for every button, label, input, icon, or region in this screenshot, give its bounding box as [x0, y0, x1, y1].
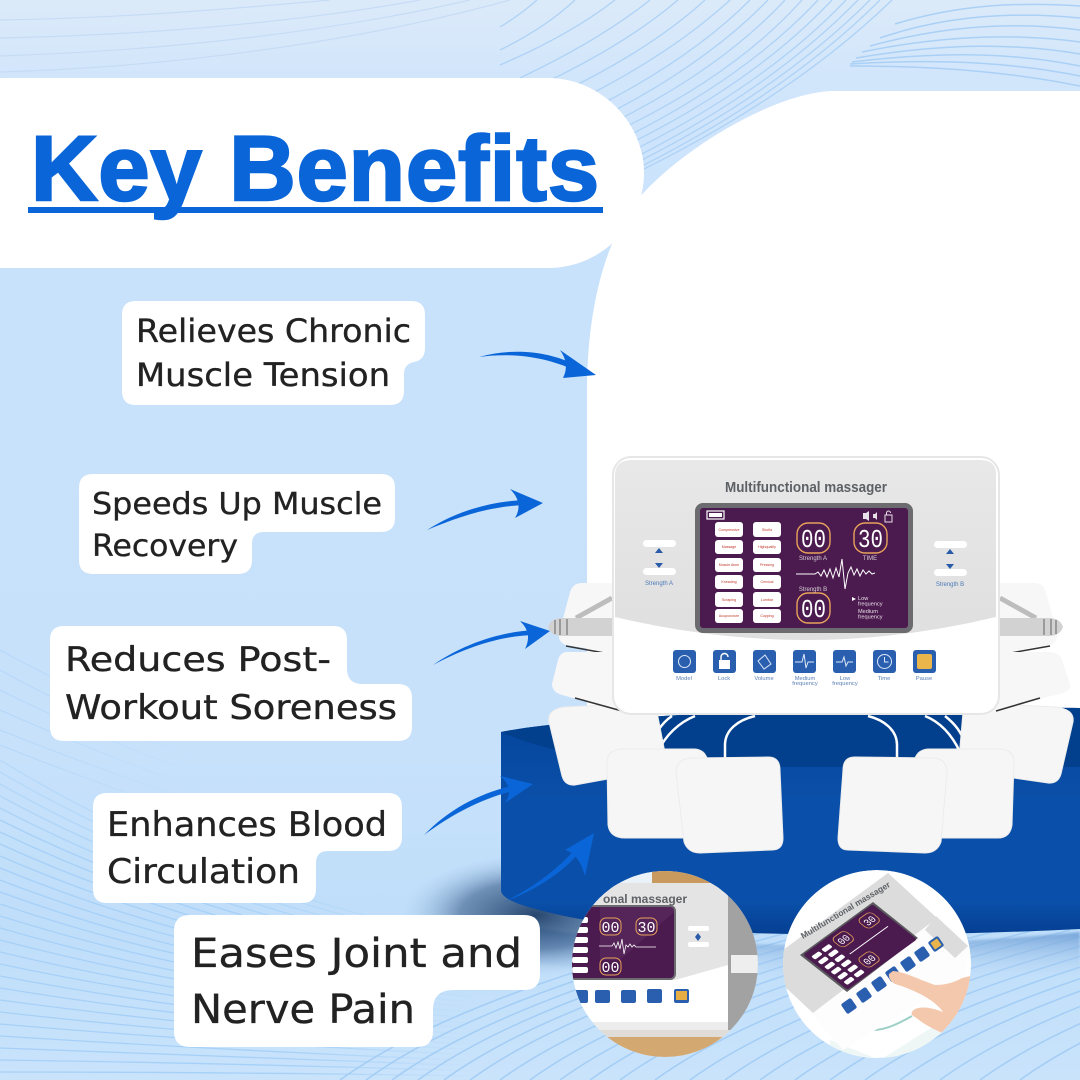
time display [854, 523, 887, 562]
time display: 30 [858, 525, 883, 555]
strength B display: 00 [801, 595, 826, 625]
mode buttons: Scraping [722, 598, 736, 602]
strength B control [934, 541, 967, 588]
arrow: Relieves [479, 350, 596, 378]
strength B control: Strength B [936, 582, 964, 588]
callout: Speeds Up Muscle Recovery: Speeds Up Muscle [92, 487, 382, 522]
control buttons: Low [840, 676, 851, 682]
mode buttons: Lumbar [761, 598, 774, 602]
product photo circle: finger pressing button: Multifunctional massager [799, 879, 892, 941]
mode buttons: Highquality [758, 545, 776, 549]
product photo circle: screen close-up [572, 871, 758, 1057]
arrow: Enhances [424, 776, 533, 835]
callout: Relieves Chronic Muscle Tension: Muscle Tension [136, 356, 390, 394]
product photo circle: screen close-up: 00 [601, 960, 620, 977]
callout: Enhances Blood Circulation [93, 793, 402, 903]
callout: Reduces Post-Workout Soreness: Reduces Post- [65, 640, 331, 680]
control buttons: frequency [832, 681, 858, 687]
mode buttons: Kneading [721, 580, 737, 584]
title panel [0, 78, 644, 268]
mode buttons: Acupuncture [719, 614, 739, 618]
callout: Eases Joint and Nerve Pain: Nerve Pain [191, 987, 415, 1033]
product photo circle: finger pressing button: 00 [836, 934, 854, 948]
strength A control [643, 540, 676, 587]
pedestal: blue cylinder [400, 708, 1080, 981]
mode buttons: Massage [722, 545, 736, 549]
frequency labels: frequency [858, 614, 883, 620]
frequency labels: Low [858, 596, 869, 602]
arrow: Eases [504, 833, 594, 902]
strength B display: Strength B [799, 587, 827, 593]
product photo circle: finger pressing button: 30 [862, 915, 880, 929]
time display: TIME [863, 556, 877, 562]
arrow: Speeds [427, 489, 543, 530]
control buttons: Medium [795, 676, 815, 682]
device: multifunctional massager [613, 457, 999, 714]
callout: Enhances Blood Circulation: Enhances Blood [107, 805, 387, 845]
frequency labels: frequency [858, 602, 883, 608]
status icons [863, 511, 892, 522]
strength A display: 00 [801, 525, 826, 555]
arrow: Reduces [433, 621, 550, 665]
product photo circle: finger pressing button: 00 [862, 954, 880, 968]
mode buttons: Cervical [761, 580, 774, 584]
mode buttons: Muscle Atom [719, 563, 739, 567]
electrode pads: lower left [549, 703, 783, 853]
control buttons: frequency [792, 681, 818, 687]
bottom rising lines [340, 930, 1080, 1080]
strength A control: Strength A [645, 581, 673, 587]
electrode pads: lower right [838, 703, 1073, 853]
strength A display [797, 523, 830, 562]
control buttons: Model [676, 676, 692, 682]
upper faint lines [0, 0, 510, 72]
LCD screen [695, 503, 913, 633]
electrode cables [650, 716, 968, 762]
mode buttons: Shufia [762, 528, 772, 532]
callout: Relieves Chronic Muscle Tension: Relieves Chronic [136, 312, 411, 350]
control buttons: Pause [916, 676, 932, 682]
strength B display [797, 587, 830, 625]
title: Key Benefits: Key Benefits [31, 118, 599, 220]
waveform [796, 559, 875, 589]
white backdrop shape [587, 91, 1080, 730]
callout: Reduces Post-Workout Soreness: Workout Soreness [65, 688, 397, 728]
callout: Speeds Up Muscle Recovery [79, 474, 395, 574]
callout: Eases Joint and Nerve Pain [174, 915, 540, 1047]
control buttons: Time [878, 676, 890, 682]
hand [889, 971, 975, 1034]
product photo circle: finger pressing button [783, 870, 975, 1060]
frequency labels: Medium [858, 609, 878, 615]
control buttons: Lock [718, 676, 730, 682]
callout: Relieves Chronic Muscle Tension [122, 301, 425, 405]
product photo circle: screen close-up: 30 [637, 920, 656, 937]
product photo circle: screen close-up: onal massager [603, 892, 687, 906]
mode buttons: Cupping [760, 614, 774, 618]
device heading: Multifunctional massager [725, 480, 887, 496]
callout: Enhances Blood Circulation: Circulation [107, 852, 300, 892]
control buttons: Volume [754, 676, 774, 682]
product photo circle: screen close-up: 00 [601, 920, 620, 937]
mode buttons: Compressive [719, 528, 739, 532]
strength A display: Strength A [799, 556, 827, 562]
mode buttons [715, 522, 781, 623]
frequency labels [852, 596, 883, 620]
control buttons [673, 650, 936, 687]
mode buttons: Pressing [760, 563, 774, 567]
battery icon [707, 511, 724, 519]
callout: Eases Joint and Nerve Pain: Eases Joint and [191, 931, 522, 977]
connector cables [548, 598, 1063, 636]
callout: Reduces Post-Workout Soreness [50, 626, 412, 741]
circle 2 buttons [841, 936, 944, 1014]
lower left wave lines [0, 650, 220, 825]
callout: Speeds Up Muscle Recovery: Recovery [92, 529, 238, 564]
electrode pads: behind device [552, 583, 1070, 712]
